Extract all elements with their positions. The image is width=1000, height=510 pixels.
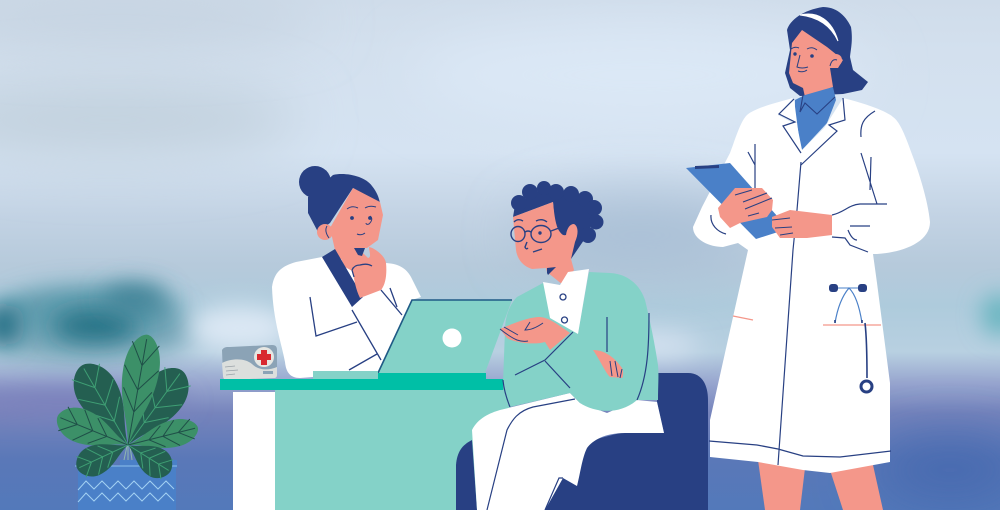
hair [785, 7, 868, 96]
trouser lines [487, 399, 575, 510]
first aid box [222, 345, 277, 380]
coat [693, 98, 930, 473]
trousers [472, 393, 664, 510]
curly hair [511, 181, 604, 259]
clipboard [686, 163, 778, 239]
stethoscope [829, 284, 872, 392]
plant in pot [51, 332, 201, 510]
hand open [500, 317, 570, 350]
seated doctor (left) [272, 166, 421, 378]
neck and face [789, 30, 843, 97]
face [330, 188, 383, 278]
headband [800, 14, 838, 41]
laptop [378, 300, 512, 373]
hair [308, 174, 380, 232]
desk [220, 371, 510, 510]
face [513, 202, 578, 285]
finger lines [735, 190, 793, 235]
ear [317, 224, 333, 240]
coat lines [310, 264, 402, 370]
hand resting [593, 350, 623, 378]
leaf: right light [125, 414, 201, 458]
pot [75, 446, 177, 510]
chair [456, 373, 708, 510]
glasses [511, 220, 559, 252]
neck [335, 246, 368, 272]
lapels [779, 98, 845, 165]
cardigan lines [500, 313, 649, 407]
ear [830, 54, 842, 66]
shirt [795, 87, 836, 150]
leaf: top left dark [64, 355, 146, 456]
coat lines [709, 111, 891, 465]
leaf: lower left dark [71, 431, 134, 482]
coat [272, 257, 421, 378]
seated patient [456, 181, 708, 510]
face details [791, 47, 837, 72]
shirt collar [800, 95, 835, 114]
cardigan [503, 272, 658, 411]
left hand [718, 188, 773, 228]
chin shadow [354, 248, 365, 256]
chin shadow [547, 267, 556, 275]
collar [322, 249, 363, 307]
face details [326, 206, 376, 238]
hand [352, 247, 386, 298]
leaf: centre light [110, 332, 165, 448]
hair bun [299, 166, 331, 198]
leaf: top right dark [111, 358, 199, 457]
leaf: lower right dark [120, 432, 178, 484]
shirt [543, 269, 589, 334]
buttons [560, 294, 568, 323]
pocket lines [733, 316, 881, 325]
leaf: left light [51, 401, 134, 461]
right hand [772, 210, 832, 238]
legs [758, 460, 805, 510]
standing doctor [686, 7, 930, 510]
